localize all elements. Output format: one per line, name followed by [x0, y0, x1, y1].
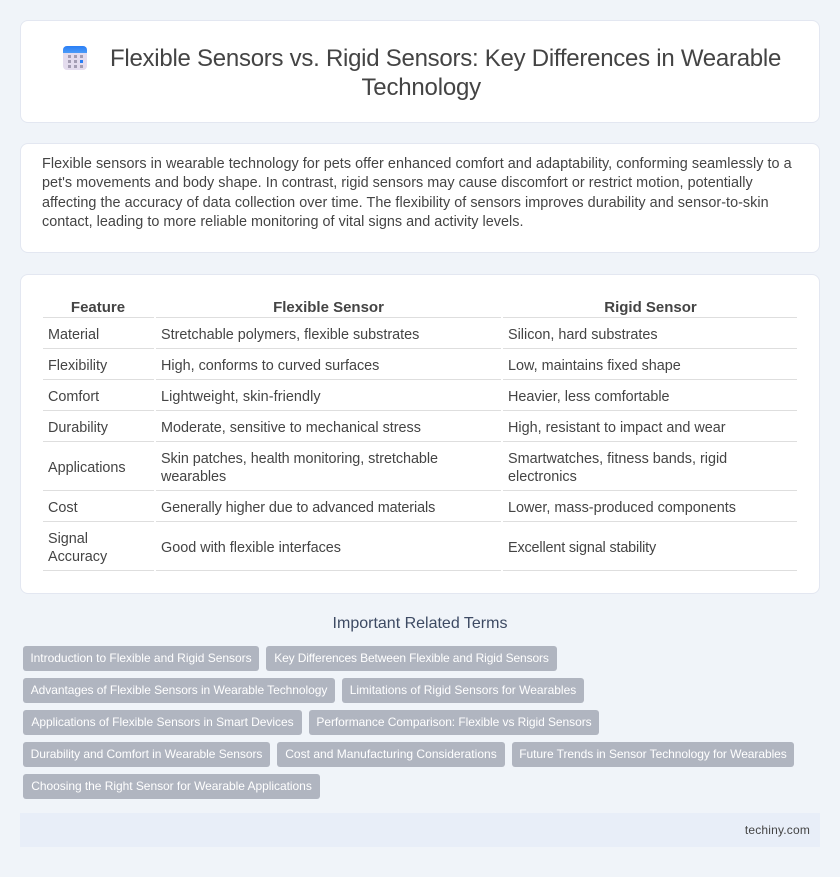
row: applications: wearables: [161, 469, 226, 485]
row: durability: High, resistant to impact and wear: [508, 420, 726, 436]
row: signal accuracy: Good with flexible interfaces: [161, 540, 341, 556]
intro text: Flexible sensors in wearable technology for pets offer enhanced comfort and adaptability, conforming seamlessly to a: [42, 156, 792, 172]
tag: [23, 710, 302, 735]
heading: important related terms: Important Related Terms: [333, 615, 507, 632]
footer source text: techiny.com: [745, 823, 810, 837]
row: signal accuracy: [48, 531, 656, 565]
tag: [309, 710, 599, 735]
row: applications: Skin patches, health monitoring, stretchable: [161, 451, 438, 467]
tag: [512, 742, 794, 767]
title line 1: Flexible Sensors vs. Rigid Sensors: Key Differences in Wearable: [110, 45, 781, 72]
tag: Key Differences Between Flexible and Rigid Sensors: [274, 651, 549, 665]
row: signal accuracy: Accuracy: [48, 549, 107, 565]
row: signal accuracy: Signal: [48, 531, 88, 547]
tag: Durability and Comfort in Wearable Sensors: [31, 747, 262, 761]
header row: Rigid Sensor: [604, 299, 697, 316]
row: flexibility: [48, 358, 681, 374]
row: cost: [48, 500, 736, 516]
intro text: pet's movements and body shape. In contrast, rigid sensors may cause discomfort or restrict motion, potentially: [42, 175, 753, 191]
row: applications: electronics: [508, 469, 577, 485]
tag: [23, 742, 270, 767]
row: flexibility: High, conforms to curved surfaces: [161, 358, 379, 374]
row: comfort: Heavier, less comfortable: [508, 389, 670, 405]
header row: [71, 299, 697, 316]
tag: Limitations of Rigid Sensors for Wearables: [350, 683, 576, 697]
tag: Introduction to Flexible and Rigid Sensors: [30, 651, 252, 665]
intro text: [42, 156, 792, 230]
row: signal accuracy: Excellent signal stability: [508, 540, 656, 556]
header row: Feature: [71, 299, 125, 316]
row: comfort: [48, 389, 670, 405]
panel: comparison table: [20, 274, 820, 594]
row: cost: Generally higher due to advanced materials: [161, 500, 435, 516]
tag: Performance Comparison: Flexible vs Rigid Sensors: [316, 715, 592, 729]
tag: [23, 646, 259, 671]
icon: calendar: [63, 46, 87, 70]
title line 2: Technology: [362, 74, 481, 101]
comparison table: [43, 299, 797, 571]
tag: Choosing the Right Sensor for Wearable Applications: [31, 779, 312, 793]
tag list: [23, 646, 794, 799]
row: applications: Applications: [48, 460, 126, 476]
row: durability: Moderate, sensitive to mechanical stress: [161, 420, 421, 436]
tag: [23, 678, 335, 703]
panel: title header: [20, 20, 820, 123]
row: flexibility: Low, maintains fixed shape: [508, 358, 681, 374]
row: material: Material: [48, 327, 99, 343]
panel: introduction: [20, 143, 820, 253]
row: cost: Lower, mass-produced components: [508, 500, 736, 516]
intro text: affecting the accuracy of data collection over time. The flexibility of sensors improves durability and sensor-to-skin: [42, 195, 769, 211]
row: applications: [48, 451, 727, 485]
tag: Future Trends in Sensor Technology for Wearables: [519, 747, 787, 761]
footer bar: [20, 813, 820, 847]
header row: Flexible Sensor: [273, 299, 384, 316]
row: flexibility: Flexibility: [48, 358, 107, 374]
row: durability: [48, 420, 726, 436]
tag: [342, 678, 584, 703]
row: comfort: Comfort: [48, 389, 99, 405]
row: material: [48, 327, 658, 343]
tag: Cost and Manufacturing Considerations: [285, 747, 497, 761]
row: material: Stretchable polymers, flexible substrates: [161, 327, 419, 343]
tag: Applications of Flexible Sensors in Smart Devices: [31, 715, 294, 729]
tag: [266, 646, 557, 671]
tag: Advantages of Flexible Sensors in Wearable Technology: [31, 683, 327, 697]
row: cost: Cost: [48, 500, 78, 516]
row: durability: Durability: [48, 420, 108, 436]
row: comfort: Lightweight, skin-friendly: [161, 389, 321, 405]
tag: [277, 742, 505, 767]
intro text: contact, leading to more reliable monitoring of vital signs and activity levels.: [42, 214, 524, 230]
row: material: Silicon, hard substrates: [508, 327, 658, 343]
tag: [23, 774, 320, 799]
row: applications: Smartwatches, fitness bands, rigid: [508, 451, 727, 467]
